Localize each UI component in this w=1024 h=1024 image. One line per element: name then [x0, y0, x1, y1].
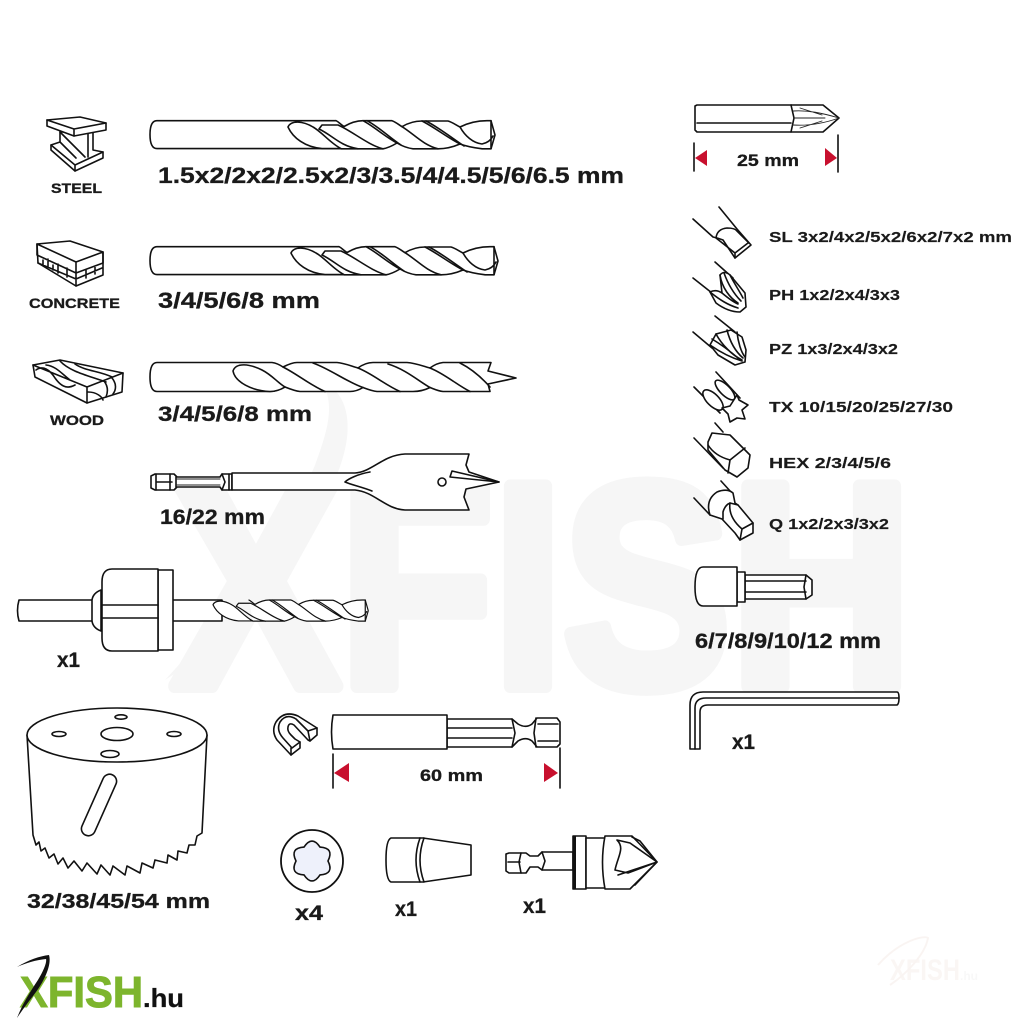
faint logo: .hu: [960, 969, 978, 983]
hole saw sizes: 32/38/45/54 mm: [27, 891, 210, 913]
countersink quantity: x1: [523, 895, 546, 918]
adapter sleeve: [386, 838, 471, 882]
pozidriv sizes: PZ 1x3/2x4/3x2: [769, 341, 898, 358]
socket adapter: [695, 567, 812, 606]
label: wood: WOOD: [50, 412, 104, 428]
faint logo: [878, 937, 978, 987]
hole saw: [27, 708, 207, 875]
bit icon: torx: [694, 372, 748, 422]
material icon: concrete: [37, 241, 103, 286]
spade bit: [151, 454, 499, 510]
magnet: [274, 714, 317, 755]
logo: Xfish.hu: .hu: [143, 983, 184, 1013]
torx sizes: TX 10/15/20/25/27/30: [769, 399, 953, 416]
bit icon: phillips: [693, 262, 746, 312]
hex sizes: HEX 2/3/4/5/6: [769, 455, 891, 472]
logo: Xfish.hu: XFISH: [20, 968, 143, 1017]
steel sizes: 1.5x2/2x2/2.5x2/3/3.5/4/4.5/5/6/6.5 mm: [158, 163, 624, 188]
dimension: 60 mm: 60 mm: [420, 766, 483, 785]
material icon: steel: [47, 117, 106, 171]
socket sizes: 6/7/8/9/10/12 mm: [695, 630, 881, 653]
wood drill sizes: 3/4/5/6/8 mm: [158, 403, 312, 426]
spade bit sizes: 16/22 mm: [160, 506, 265, 529]
concrete drill bit: [150, 247, 498, 275]
hole saw arbor with pilot drill: [18, 569, 368, 651]
dimension: 60 mm: [333, 748, 560, 788]
hex key quantity: x1: [732, 731, 755, 754]
label: steel: STEEL: [51, 180, 102, 196]
square sizes: Q 1x2/2x3/3x2: [769, 516, 889, 533]
label: concrete: CONCRETE: [29, 295, 120, 311]
dimension: 25 mm: 25 mm: [737, 151, 799, 170]
slotted sizes: SL 3x2/4x2/5x2/6x2/7x2 mm: [769, 229, 1012, 246]
arbor quantity: x1: [57, 649, 80, 672]
faint logo: XFISH: [890, 954, 960, 987]
countersink bit: [506, 836, 657, 889]
phillips sizes: PH 1x2/2x4/3x3: [769, 287, 900, 304]
background watermark: XFISH: [172, 424, 912, 748]
dimension: 25 mm: [694, 135, 838, 172]
bit icon: square: [694, 481, 753, 540]
hex key: [690, 692, 899, 749]
bit icon: pozidriv: [693, 316, 746, 365]
adapter quantity: x1: [395, 898, 417, 921]
bit icon: hex: [694, 423, 750, 477]
concrete sizes: 3/4/5/6/8 mm: [158, 288, 320, 313]
wood drill bit: [150, 362, 516, 392]
bit icon: slotted: [693, 207, 751, 258]
logo: Xfish.hu: [17, 955, 184, 1018]
magnetic bit holder: [332, 715, 560, 749]
torx nut: [281, 830, 343, 892]
steel drill bit: [150, 121, 495, 149]
screwdriver bit 25 mm: [695, 105, 839, 132]
material icon: wood: [33, 360, 123, 403]
torx nut quantity: x4: [295, 902, 323, 925]
